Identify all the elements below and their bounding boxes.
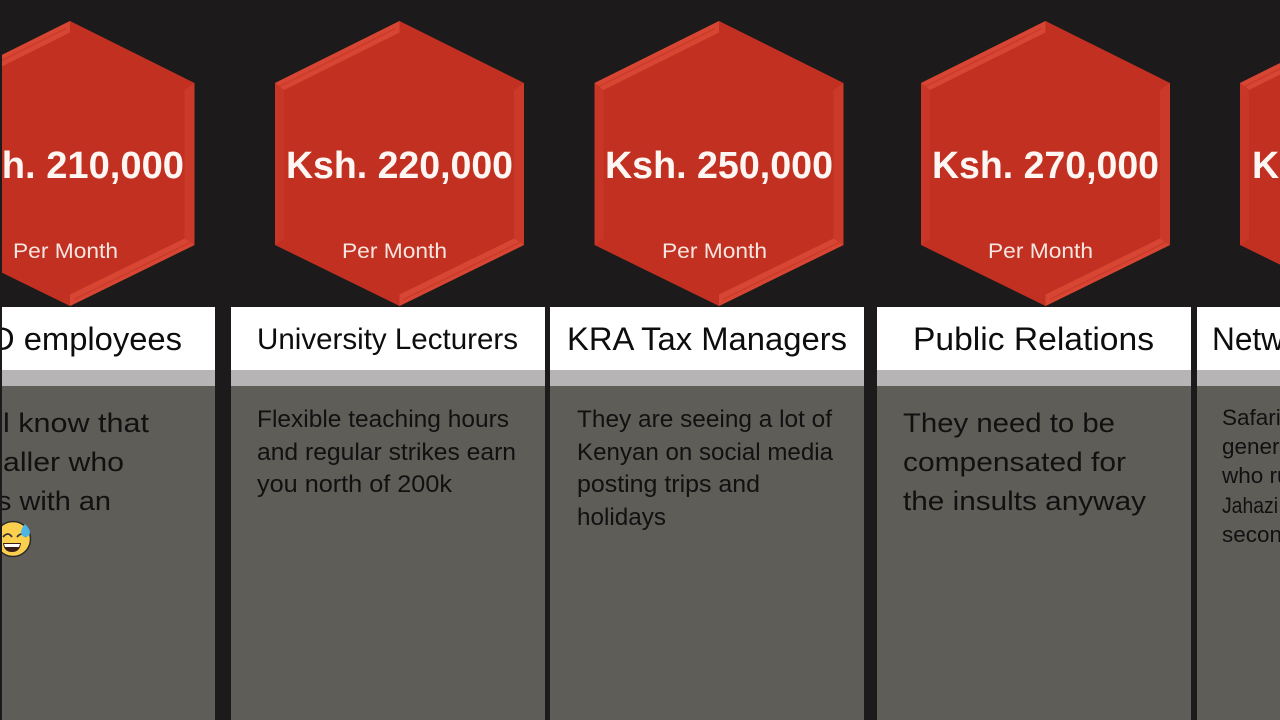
description text: you north of 200k: [257, 471, 453, 498]
hexagon badge: 210,000: [0, 21, 194, 306]
panel: call centre employees: [0, 21, 215, 720]
description text: s with an: [0, 486, 111, 516]
grey strip and body panel: [0, 370, 215, 720]
description text: They are seeing a lot of: [577, 406, 832, 433]
panel: public relations: [877, 21, 1191, 720]
description text: compensated for: [903, 447, 1126, 477]
panel: university lecturers: [231, 21, 545, 720]
panel: network engineers (cut off): [1197, 21, 1280, 720]
panel: KRA tax managers: [550, 21, 864, 720]
description text: holidays: [577, 504, 666, 531]
description text: aller who: [3, 447, 124, 477]
description text: [0, 408, 150, 516]
description text: [577, 406, 834, 531]
title bar: [550, 307, 864, 370]
hexagon badge: 210,000: Per Month: [13, 239, 118, 263]
description text: l know that: [3, 408, 150, 438]
description text: and regular strikes earn: [257, 439, 516, 466]
title bar: Public Relations: [913, 321, 1154, 357]
title bar: [231, 307, 545, 370]
description text: They need to be: [903, 408, 1115, 438]
hexagon badge: 220,000: Ksh. 220,000: [286, 145, 513, 187]
hexagon badge: 250,000: Per Month: [662, 239, 767, 263]
description text: [903, 408, 1147, 516]
title bar: KRA Tax Managers: [567, 321, 847, 357]
description text: [257, 406, 516, 498]
hexagon badge: 250,000: Ksh. 250,000: [605, 145, 833, 187]
description text: Kenyan on social media: [577, 439, 834, 466]
title bar: University Lecturers: [257, 323, 518, 356]
icon: grinning emoji with sweat drop: [0, 522, 30, 556]
hexagon badge: 270,000: [921, 21, 1170, 306]
hexagon badge: 250,000: [594, 21, 844, 306]
title bar: [877, 307, 1191, 370]
description text: the insults anyway: [903, 486, 1147, 516]
grey strip and body panel: [231, 370, 545, 720]
title bar: [1197, 307, 1280, 370]
grey strip and body panel: [550, 370, 864, 720]
grey strip and body panel: [1197, 370, 1280, 720]
description text: Flexible teaching hours: [257, 406, 509, 433]
hexagon badge: 220,000: [275, 21, 524, 306]
description text: posting trips and: [577, 471, 760, 498]
hexagon badge: cut off: [1240, 21, 1280, 306]
title bar: [0, 307, 215, 370]
hexagon badge: 220,000: Per Month: [342, 239, 447, 263]
hexagon badge: 270,000: Ksh. 270,000: [932, 145, 1159, 187]
hexagon badge: 270,000: Per Month: [988, 239, 1093, 263]
grey strip and body panel: [877, 370, 1191, 720]
description text: [1221, 405, 1280, 547]
